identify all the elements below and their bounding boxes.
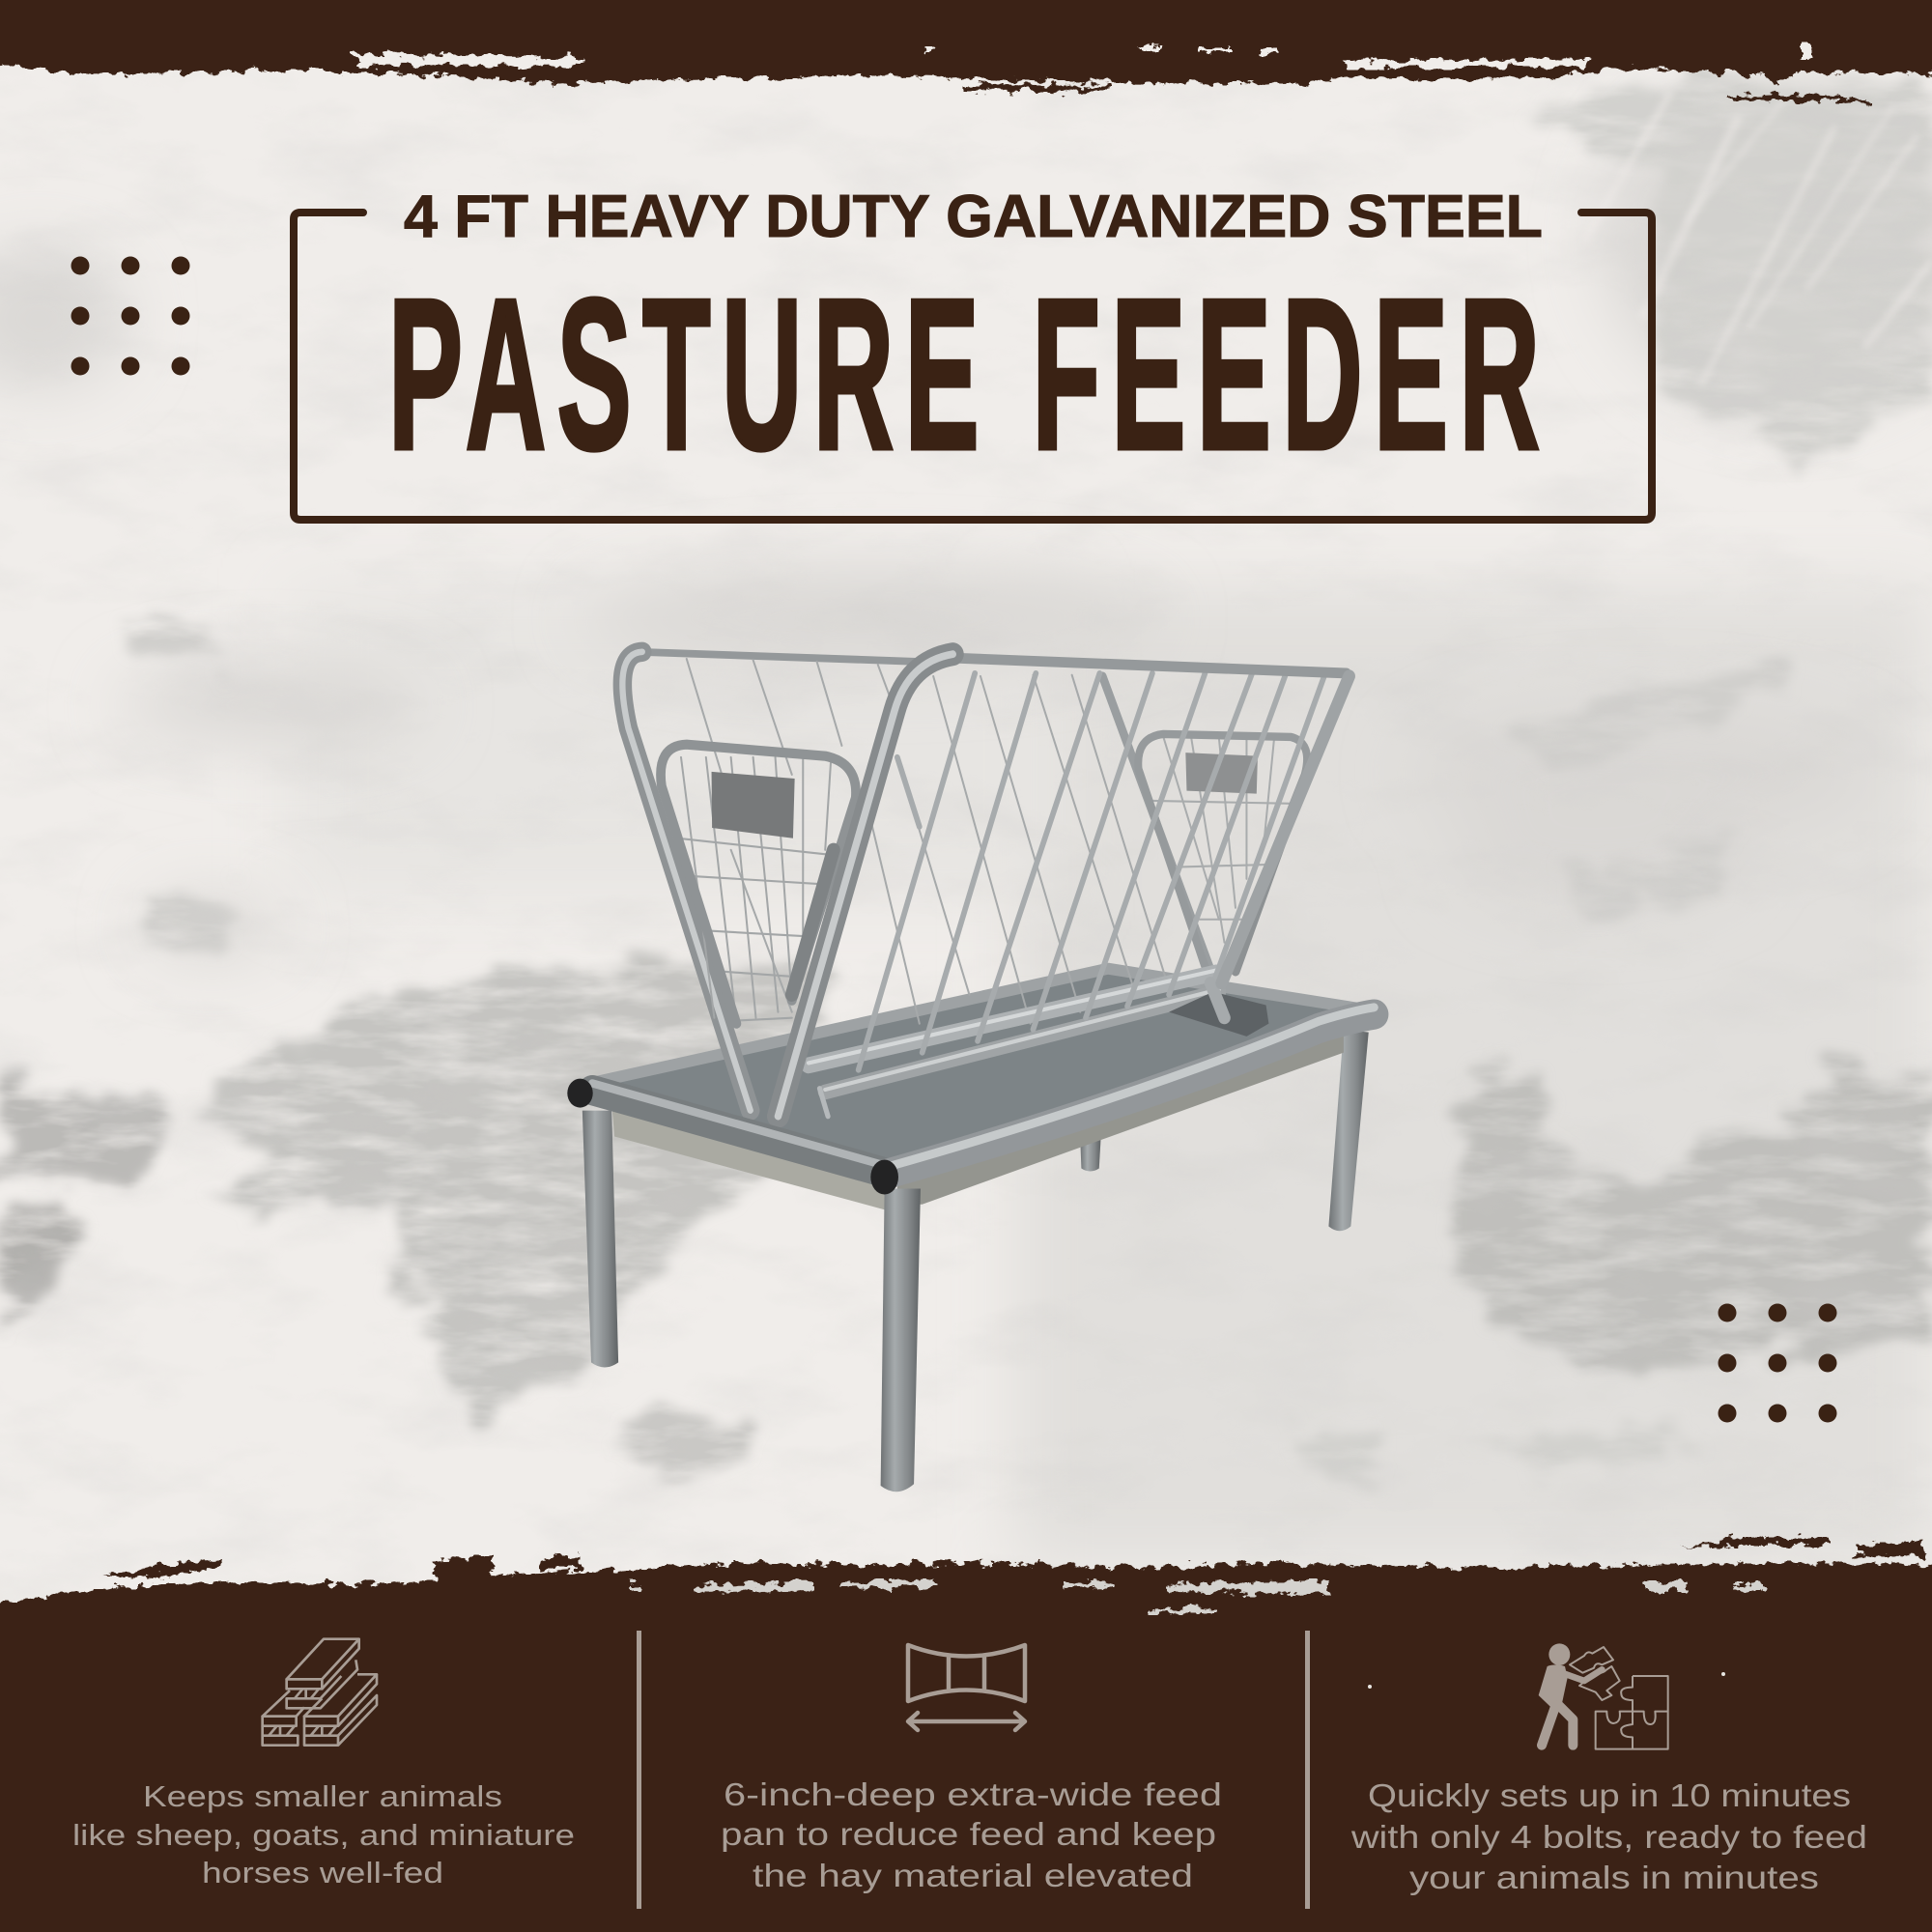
bottom torn brush band [0, 1538, 1932, 1932]
left gate panel [661, 745, 856, 1024]
caption: smaller animals [72, 1779, 575, 1889]
main title: PASTURE FEEDER [388, 256, 1540, 495]
top torn brush band [0, 0, 1932, 103]
caption: quick setup: your animals in minutes [1409, 1860, 1819, 1895]
icon: person assembling puzzle [1539, 1643, 1668, 1749]
caption: smaller animals: like sheep, goats, and miniature [72, 1818, 575, 1852]
product: galvanized steel pasture feeder [567, 652, 1374, 1492]
front frame of the rack [778, 654, 1350, 1117]
tube end caps [567, 1079, 898, 1195]
back leg [1080, 1140, 1100, 1172]
left leg [582, 1111, 618, 1367]
feed pan floor [592, 972, 1363, 1172]
icon: wide feed pan with arrow [908, 1645, 1025, 1730]
side skirts [611, 1024, 1344, 1210]
right leg [1328, 1030, 1369, 1231]
feed tubes along the rack base [809, 970, 1219, 1117]
anchor bracket [1169, 983, 1268, 1037]
right gate panel [1138, 734, 1307, 983]
pan back rim [598, 969, 1363, 1082]
subtitle: 4 FT HEAVY DUTY GALVANIZED STEEL [404, 184, 1543, 250]
caption: quick setup: Quickly sets up in 10 minutes [1368, 1777, 1851, 1813]
decorative dots: lower right [1718, 1304, 1837, 1422]
caption: feed pan: pan to reduce feed and keep [721, 1816, 1216, 1852]
caption: smaller animals: Keeps smaller animals [143, 1779, 502, 1813]
column dividers [637, 1631, 1310, 1909]
diagonal hay bars [859, 673, 1324, 1070]
front leg [881, 1189, 921, 1492]
caption: feed pan: the hay material elevated [753, 1858, 1193, 1893]
caption: feed pan: 6-inch-deep extra-wide feed [724, 1776, 1222, 1812]
caption: quick setup: with only 4 bolts, ready to feed [1350, 1819, 1867, 1855]
rear frame [622, 652, 1213, 1111]
front rim tubes [592, 1008, 1374, 1175]
decorative dots: upper left [71, 257, 189, 375]
rear wires [687, 659, 1169, 1024]
caption: quick setup [1350, 1777, 1867, 1895]
caption: feed pan [721, 1776, 1222, 1893]
caption: smaller animals: horses well-fed [202, 1856, 443, 1889]
title frame [294, 213, 1652, 520]
icon: stacked lumber [263, 1639, 377, 1746]
